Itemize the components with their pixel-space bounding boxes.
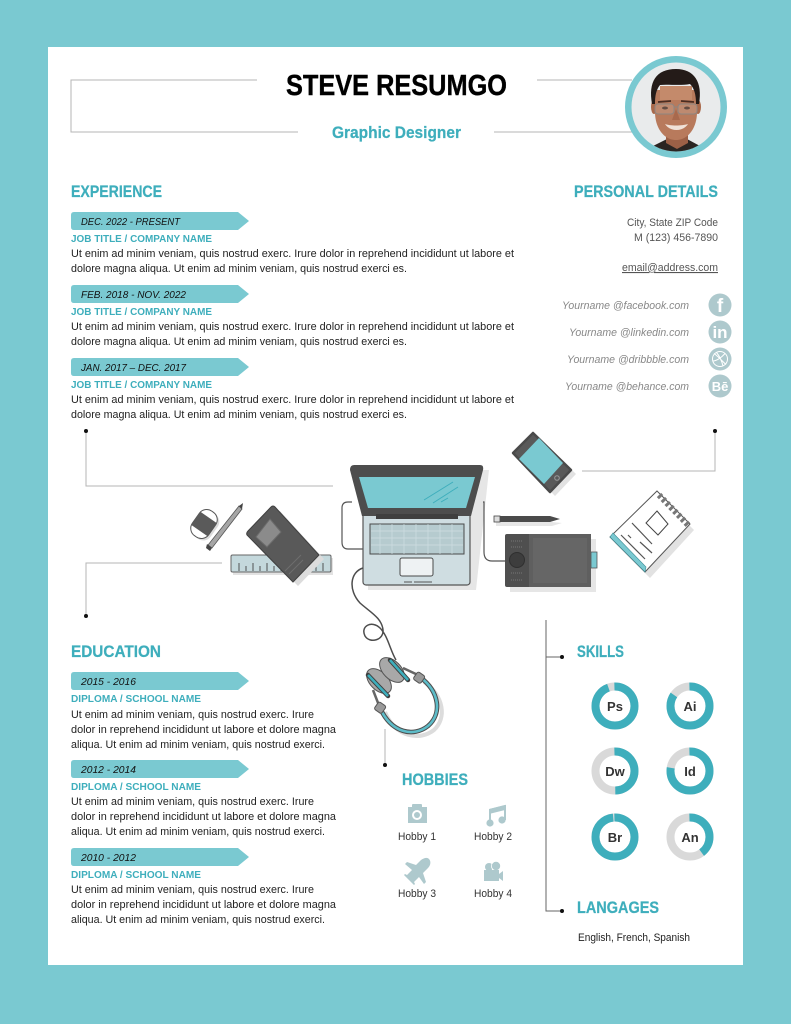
skill donut: Id: Id [684, 764, 696, 779]
hobby 3: airplane [398, 858, 436, 900]
skill donut: Dw: Dw [605, 764, 626, 779]
social: behance [565, 374, 732, 398]
education item 2: DIPLOMA / SCHOOL NAME [71, 781, 201, 793]
connector lines around desk illustration [84, 429, 717, 618]
skill donut: An: An [681, 830, 699, 845]
experience item 3: Ut enim ad minim veniam, quis nostrud exerc. Irure dolor in reprehend incididunt ut labore et [71, 394, 514, 406]
icon: dark notebook [247, 506, 324, 586]
icon: drawing tablet [483, 502, 597, 592]
icon: eraser [187, 506, 223, 544]
education item 3: aliqua. Ut enim ad minim veniam, quis nostrud exerci. [71, 914, 325, 926]
contact details: M (123) 456-7890 [634, 232, 718, 244]
skill donut: Dw [596, 752, 634, 790]
hobby 4: video camera: Hobby 4 [474, 888, 512, 900]
skill donut: Ai: Ai [684, 699, 696, 714]
social: behance: Bē [712, 379, 728, 394]
education item 2: dolor in reprehend incididunt ut labore et dolore magna [71, 811, 337, 823]
skill donut: An [670, 818, 710, 856]
title: name: STEVE RESUMGO [286, 70, 507, 102]
hobby 4: video camera [474, 861, 512, 900]
education item 1: 2015 - 2016 [80, 676, 136, 688]
languages list: English, French, Spanish [578, 932, 690, 944]
education item 1 [71, 672, 337, 751]
icon: spiral notepad [610, 491, 694, 578]
hobby 1: camera [398, 804, 436, 843]
experience item 3: JOB TITLE / COMPANY NAME [71, 379, 212, 391]
experience item 2 [71, 285, 514, 348]
education item 1: aliqua. Ut enim ad minim veniam, quis nostrud exerci. [71, 739, 325, 751]
social: linkedin: in [712, 323, 728, 342]
education item 2: Ut enim ad minim veniam, quis nostrud exerc. Irure [71, 796, 314, 808]
education item 1: DIPLOMA / SCHOOL NAME [71, 693, 201, 705]
social: dribbble [567, 348, 732, 370]
heading: skills: SKILLS [577, 642, 624, 661]
experience item 2: FEB. 2018 - NOV. 2022 [81, 289, 186, 301]
hobby 2: music note: Hobby 2 [474, 831, 512, 843]
education item 3: DIPLOMA / SCHOOL NAME [71, 869, 201, 881]
experience item 3 [71, 358, 514, 421]
icon: pencil [206, 503, 243, 551]
social: linkedin: Yourname @linkedin.com [569, 327, 689, 339]
connector: hobbies [383, 729, 387, 767]
heading: hobbies: HOBBIES [402, 770, 468, 789]
social: linkedin [569, 320, 732, 344]
icon: stylus pen [494, 516, 562, 526]
icon: ruler [231, 555, 333, 575]
education item 1: Ut enim ad minim veniam, quis nostrud exerc. Irure [71, 709, 314, 721]
heading: personal details: PERSONAL DETAILS [574, 182, 718, 201]
education item 3: 2010 - 2012 [80, 852, 136, 864]
skill donut: Ps [596, 686, 634, 726]
social: facebook [562, 294, 732, 317]
contact details: email@address.com [622, 262, 718, 274]
experience item 1: JOB TITLE / COMPANY NAME [71, 233, 212, 245]
skill donut: Br [596, 818, 634, 856]
education item 2 [71, 760, 337, 838]
education item 2: 2012 - 2014 [80, 764, 136, 776]
icon: laptop [342, 465, 489, 590]
experience item 1: DEC. 2022 - PRESENT [81, 216, 181, 228]
contact details [622, 217, 718, 274]
hobby 1: camera: Hobby 1 [398, 831, 436, 843]
skill donut: Ps: Ps [607, 699, 623, 714]
skill donut: Id [670, 752, 710, 790]
social: facebook: Yourname @facebook.com [562, 300, 689, 312]
experience item 2: JOB TITLE / COMPANY NAME [71, 306, 212, 318]
header frame lines [71, 80, 632, 132]
heading: experience: EXPERIENCE [71, 182, 162, 201]
social: dribbble: Yourname @dribbble.com [567, 354, 689, 366]
education item 1: dolor in reprehend incididunt ut labore et dolore magna [71, 724, 337, 736]
education item 3: dolor in reprehend incididunt ut labore et dolore magna [71, 899, 337, 911]
experience item 2: Ut enim ad minim veniam, quis nostrud exerc. Irure dolor in reprehend incididunt ut labore et [71, 321, 514, 333]
experience item 2: dolore magna aliqua. Ut enim ad minim veniam, quis nostrud exerci es. [71, 336, 407, 348]
subtitle: job role: Graphic Designer [332, 123, 461, 142]
skill donut: Br: Br [608, 830, 622, 845]
education item 3: Ut enim ad minim veniam, quis nostrud exerc. Irure [71, 884, 314, 896]
experience item 3: dolore magna aliqua. Ut enim ad minim veniam, quis nostrud exerci es. [71, 409, 407, 421]
hobby 2: music note [474, 805, 512, 843]
contact details: City, State ZIP Code [627, 217, 718, 229]
experience item 1 [71, 212, 514, 275]
skill donut: Ai [670, 686, 710, 726]
icon: headphones [352, 568, 442, 736]
experience item 1: dolore magna aliqua. Ut enim ad minim veniam, quis nostrud exerci es. [71, 263, 407, 275]
icon: phone [513, 433, 576, 496]
experience item 3: JAN. 2017 – DEC. 2017 [80, 362, 187, 374]
education item 3 [71, 848, 337, 926]
education item 2: aliqua. Ut enim ad minim veniam, quis nostrud exerci. [71, 826, 325, 838]
panel: resume page [48, 47, 743, 965]
hobby 3: airplane: Hobby 3 [398, 888, 436, 900]
experience item 1: Ut enim ad minim veniam, quis nostrud exerc. Irure dolor in reprehend incididunt ut labore et [71, 248, 514, 260]
heading: languages: LANGAGES [577, 898, 659, 917]
social: facebook: f [717, 296, 724, 317]
icon: profile photo [625, 56, 727, 158]
social: behance: Yourname @behance.com [565, 381, 689, 393]
connector: skills and languages [546, 620, 564, 913]
heading: education: EDUCATION [71, 642, 161, 661]
